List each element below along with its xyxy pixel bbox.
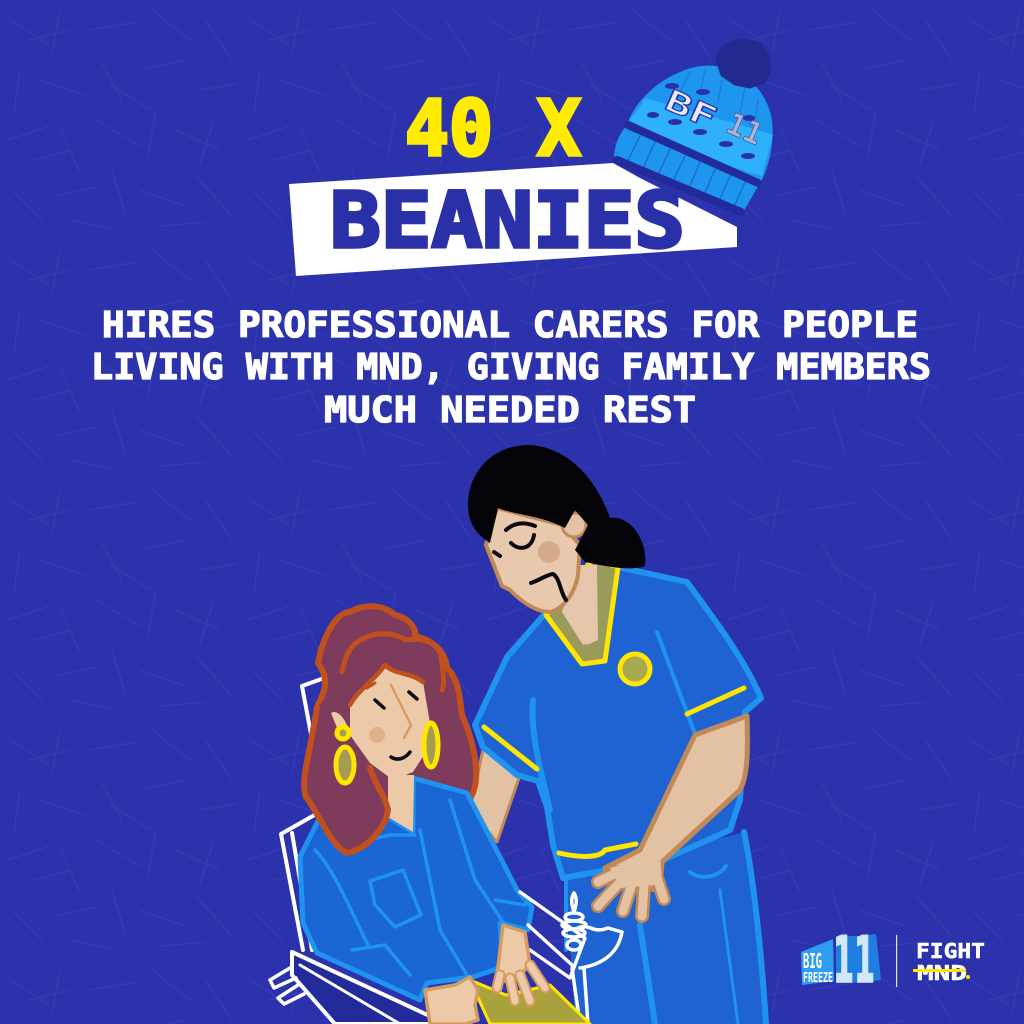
yellow sleeve and hem trim	[484, 688, 744, 856]
logo divider	[896, 935, 897, 987]
logo: Fight MND	[913, 939, 985, 985]
woman: left hair lobe	[304, 680, 388, 853]
carer hair	[468, 445, 645, 568]
woman: hair back	[304, 606, 476, 853]
hat lettering: BF	[660, 83, 721, 136]
carer: trousers	[566, 832, 766, 1024]
white banner with heading	[289, 163, 737, 276]
hat lettering	[660, 83, 768, 153]
yellow earrings	[336, 723, 438, 783]
logo: Big Freeze 11: 11	[833, 924, 875, 998]
carer: near arm and hand	[598, 716, 747, 916]
carer: head	[468, 445, 645, 645]
hat lettering: 11	[721, 106, 768, 153]
logo: Big Freeze 11: BIG	[803, 949, 822, 973]
front hairline curl	[342, 634, 444, 690]
logo: Big Freeze 11	[801, 924, 881, 998]
wheelchair: headrest and back	[281, 677, 327, 950]
subheading text block	[91, 305, 931, 431]
icon: beanie hat	[614, 40, 773, 214]
pompom	[717, 40, 770, 87]
woman: jacket and body	[300, 778, 532, 1000]
logo: Fight MND: FIGHT	[916, 939, 985, 963]
illustration: carer and person in wheelchair	[270, 445, 766, 1024]
shirt badge	[620, 654, 650, 684]
wheelchair: armrest and joystick	[270, 892, 622, 1024]
carer: far arm	[470, 745, 520, 842]
subheading text block: HIRES PROFESSIONAL CARERS FOR PEOPLE	[102, 305, 918, 346]
subheading text block: LIVING WITH MND, GIVING FAMILY MEMBERS	[91, 347, 931, 388]
woman: face	[331, 634, 444, 783]
woman: hands	[425, 925, 545, 1024]
carer: shirt	[475, 559, 761, 878]
woman: yellow trousers	[470, 980, 590, 1024]
heading: 40 x: 40 X	[405, 85, 581, 174]
woman: neck	[388, 775, 414, 832]
heading: beanies: BEANIES	[330, 177, 685, 266]
logo: Big Freeze 11: FREEZE	[803, 971, 833, 986]
subheading text block: MUCH NEEDED REST	[324, 390, 696, 431]
logo: Fight MND: MND	[917, 961, 967, 985]
